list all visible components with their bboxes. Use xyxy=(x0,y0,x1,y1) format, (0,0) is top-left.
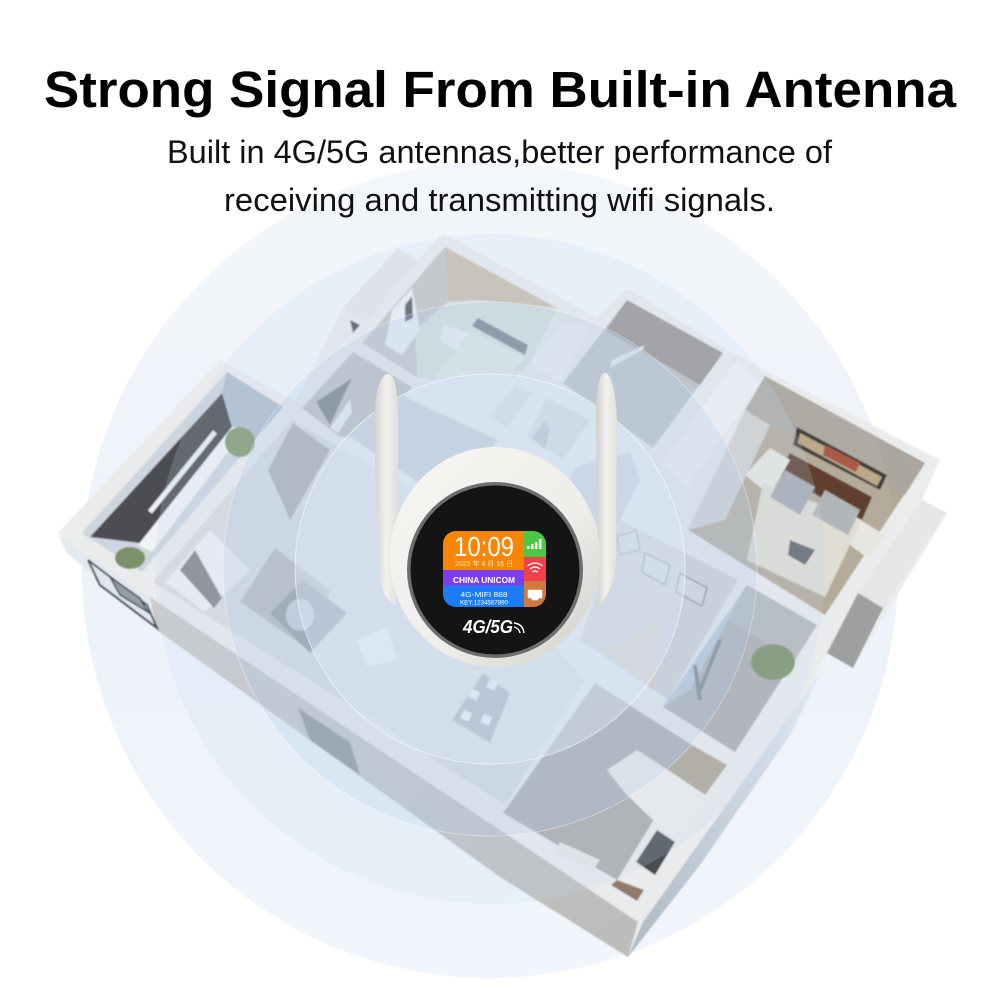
network name: 4G-MIFI 888 xyxy=(460,590,508,599)
date: 2025 年 4 月 16 日 xyxy=(455,559,513,568)
small upper room xyxy=(302,352,412,440)
back wall in beige xyxy=(445,247,557,308)
lower right wall with window xyxy=(827,500,947,668)
right side face xyxy=(628,665,825,957)
bed headboard xyxy=(472,318,528,355)
wifi key: KEY:1234567890 xyxy=(460,600,509,606)
main bedroom xyxy=(688,376,925,615)
nightstands xyxy=(745,448,790,495)
icon: wifi xyxy=(528,563,542,572)
gallery room xyxy=(580,520,738,700)
building top surface xyxy=(58,233,947,957)
sofa xyxy=(270,580,347,653)
left end face with window xyxy=(58,535,157,630)
front wall window xyxy=(298,708,360,775)
wooden floor corner xyxy=(668,745,727,795)
right antenna xyxy=(596,373,617,606)
brown rug xyxy=(611,880,644,901)
bed xyxy=(747,483,862,597)
central rooms xyxy=(350,385,640,530)
clock: 10:09 xyxy=(454,531,514,562)
black display face xyxy=(410,486,580,654)
white spherical body xyxy=(390,447,600,667)
side chair xyxy=(357,627,398,667)
big living and dining room xyxy=(153,420,585,805)
subtitle block xyxy=(167,134,832,218)
4G/5G logo: 4G/5G xyxy=(462,617,513,637)
left wall with wardrobe xyxy=(362,247,448,377)
plant room xyxy=(663,585,817,752)
nightstand xyxy=(440,325,470,350)
title: Strong Signal From Built-in Antenna xyxy=(44,61,957,118)
outermost signal circle, behind the building xyxy=(82,162,898,978)
router device xyxy=(374,373,617,667)
icon: logo wifi waves xyxy=(514,623,524,633)
bed painting xyxy=(793,427,887,490)
second wave xyxy=(223,302,757,836)
balcony room xyxy=(82,372,283,572)
storage room xyxy=(563,300,723,448)
bed xyxy=(435,330,525,378)
outer wave xyxy=(82,162,898,978)
floor plan of the apartment xyxy=(58,233,947,957)
third wave xyxy=(155,234,825,904)
silver ring of the display xyxy=(407,482,583,658)
upper bedroom xyxy=(362,247,557,380)
colour screen xyxy=(443,531,546,608)
white partition wall xyxy=(663,360,760,487)
kitchen counter xyxy=(607,750,705,836)
left antenna xyxy=(374,374,398,606)
icon: ethernet port xyxy=(528,590,542,600)
white wall beside the bedroom xyxy=(530,325,590,383)
icon: signal bars xyxy=(527,539,542,549)
carrier name: CHINA UNICOM xyxy=(453,576,515,585)
subtitle line two: receiving and transmitting wifi signals. xyxy=(224,182,775,218)
signal wave circles overlaid on the building xyxy=(82,162,898,978)
front wall face xyxy=(150,597,638,957)
inner wave xyxy=(295,374,685,764)
headboard xyxy=(777,453,872,520)
kitchen and lounge room xyxy=(503,683,727,901)
carpet xyxy=(240,548,330,652)
potted plant xyxy=(751,644,795,680)
dining table xyxy=(452,673,510,743)
stub wall with dark underside xyxy=(343,248,418,333)
cooktop xyxy=(636,830,675,875)
subtitle line one: Built in 4G/5G antennas,better performance of xyxy=(167,134,832,170)
sofa cushions xyxy=(555,842,600,872)
